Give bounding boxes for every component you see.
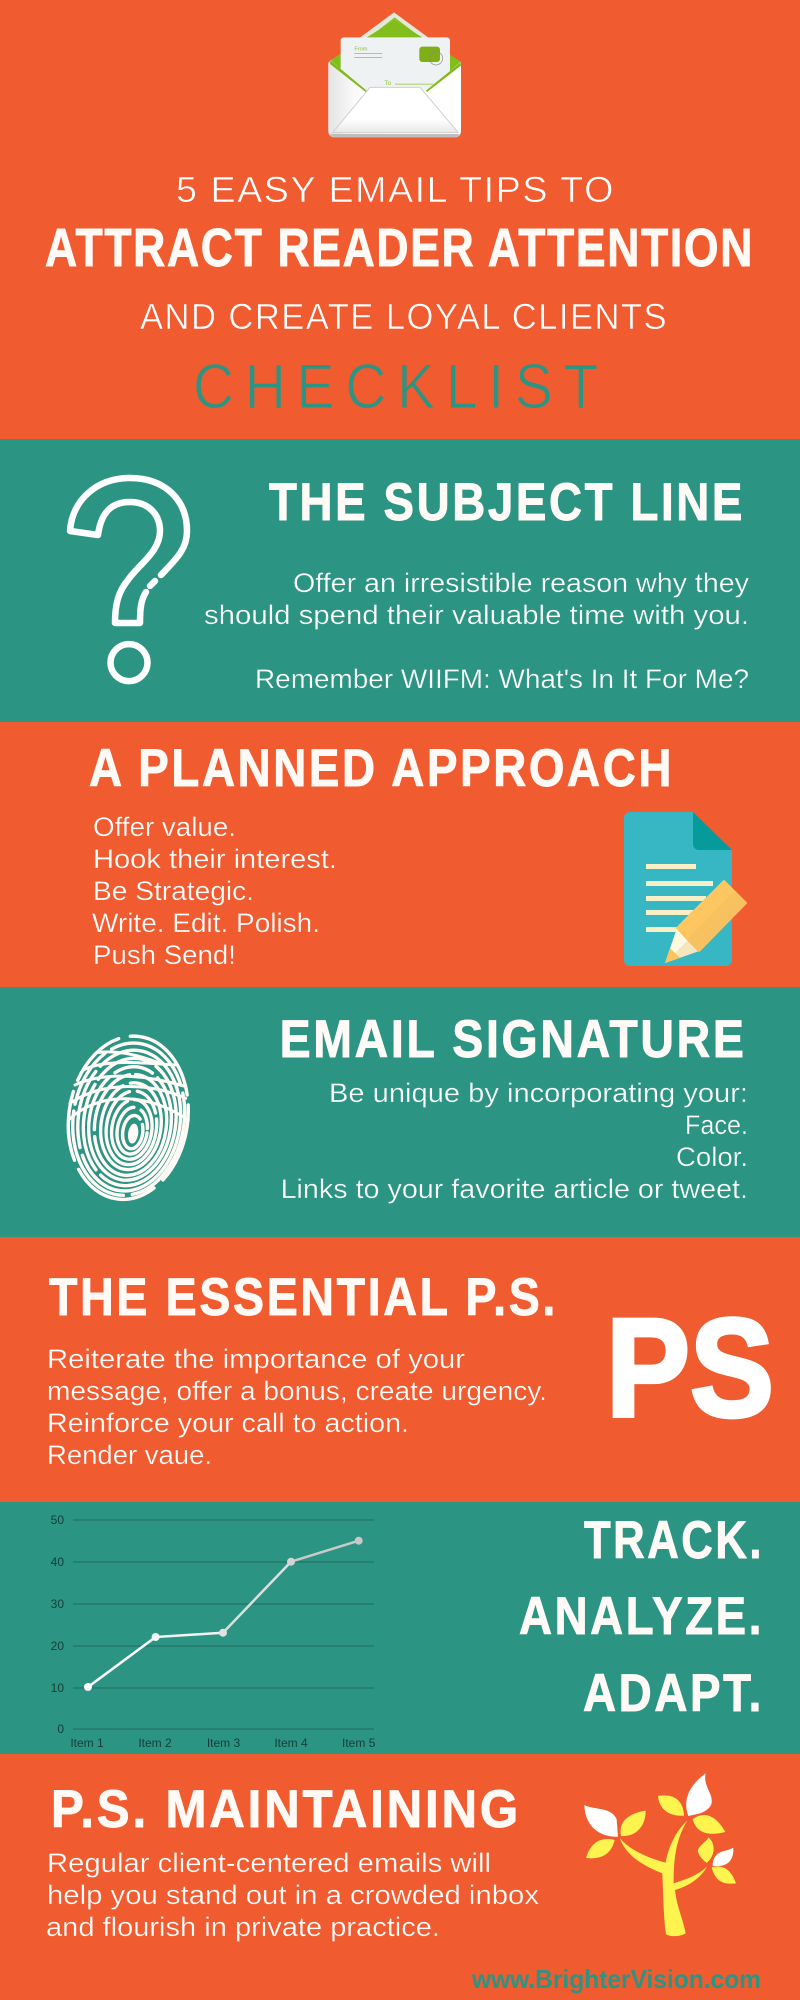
body text: Remember WIIFM: What's In It For Me? [255, 664, 749, 694]
body text: Hook their interest. [93, 844, 337, 874]
body text: help you stand out in a crowded inbox [47, 1880, 539, 1910]
body text [204, 568, 750, 694]
body text [47, 1344, 547, 1470]
line chart: 40 [51, 1555, 64, 1569]
line chart: Item 1 [70, 1736, 104, 1750]
body text: Regular client-centered emails will [47, 1848, 491, 1878]
icon: fingerprint [58, 1028, 199, 1207]
checklist label: CHECKLIST [193, 352, 609, 422]
line chart: Item 3 [207, 1736, 240, 1750]
website url: www.BrighterVision.com [471, 1964, 761, 1994]
panel: email signature [0, 987, 800, 1237]
body text: should spend their valuable time with you. [204, 600, 749, 630]
line chart: 20 [51, 1639, 64, 1653]
title line 1: 5 EASY EMAIL TIPS TO [176, 169, 615, 210]
body text: Color. [676, 1142, 748, 1172]
PS graphic: PS [606, 1289, 774, 1446]
line chart: Item 4 [274, 1736, 308, 1750]
panel: header [0, 0, 800, 439]
body text [281, 1078, 748, 1204]
body text: and flourish in private practice. [46, 1912, 440, 1942]
body text [46, 1848, 539, 1942]
heading: THE SUBJECT LINE [269, 473, 745, 532]
icon: tree [584, 1773, 736, 1936]
line chart: 50 [51, 1513, 64, 1527]
heading: P.S. MAINTAINING [51, 1780, 521, 1839]
panel: a planned approach [0, 722, 800, 987]
body text [92, 812, 337, 970]
line chart: 10 [51, 1681, 64, 1695]
icon: open envelope: From [354, 47, 368, 53]
icon: document and pencil [624, 812, 746, 966]
heading: A PLANNED APPROACH [89, 739, 674, 798]
line chart: Item 5 [342, 1736, 376, 1750]
panel: track analyze adapt [0, 1502, 800, 1754]
body text: Offer an irresistible reason why they [293, 568, 750, 598]
line chart: Item 2 [138, 1736, 172, 1750]
text: adapt: ADAPT. [583, 1664, 764, 1723]
icon: open envelope [328, 12, 461, 137]
icon: question mark [70, 478, 187, 681]
body text: Links to your favorite article or tweet. [281, 1174, 748, 1204]
heading: EMAIL SIGNATURE [280, 1010, 747, 1069]
body text: Be unique by incorporating your: [329, 1078, 748, 1108]
text: analyze: ANALYZE. [519, 1587, 764, 1646]
panel: p.s. maintaining [0, 1754, 800, 2000]
title line 3: AND CREATE LOYAL CLIENTS [140, 296, 668, 337]
body text: Reinforce your call to action. [47, 1408, 409, 1438]
body text: Be Strategic. [93, 876, 254, 906]
icon: open envelope: To [384, 80, 391, 87]
body text: Push Send! [93, 940, 236, 970]
body text: message, offer a bonus, create urgency. [47, 1376, 547, 1406]
panel: the subject line [0, 439, 800, 722]
panel: the essential p.s. [0, 1237, 800, 1502]
line chart: 0 [57, 1722, 64, 1736]
line chart [51, 1513, 376, 1750]
body text: Face. [685, 1110, 748, 1140]
body text: Render vaue. [47, 1440, 212, 1470]
body text: Reiterate the importance of your [47, 1344, 465, 1374]
body text: Write. Edit. Polish. [92, 908, 320, 938]
text: track: TRACK. [584, 1511, 764, 1570]
body text: Offer value. [93, 812, 236, 842]
heading: THE ESSENTIAL P.S. [49, 1268, 558, 1327]
line chart: 30 [51, 1597, 64, 1611]
